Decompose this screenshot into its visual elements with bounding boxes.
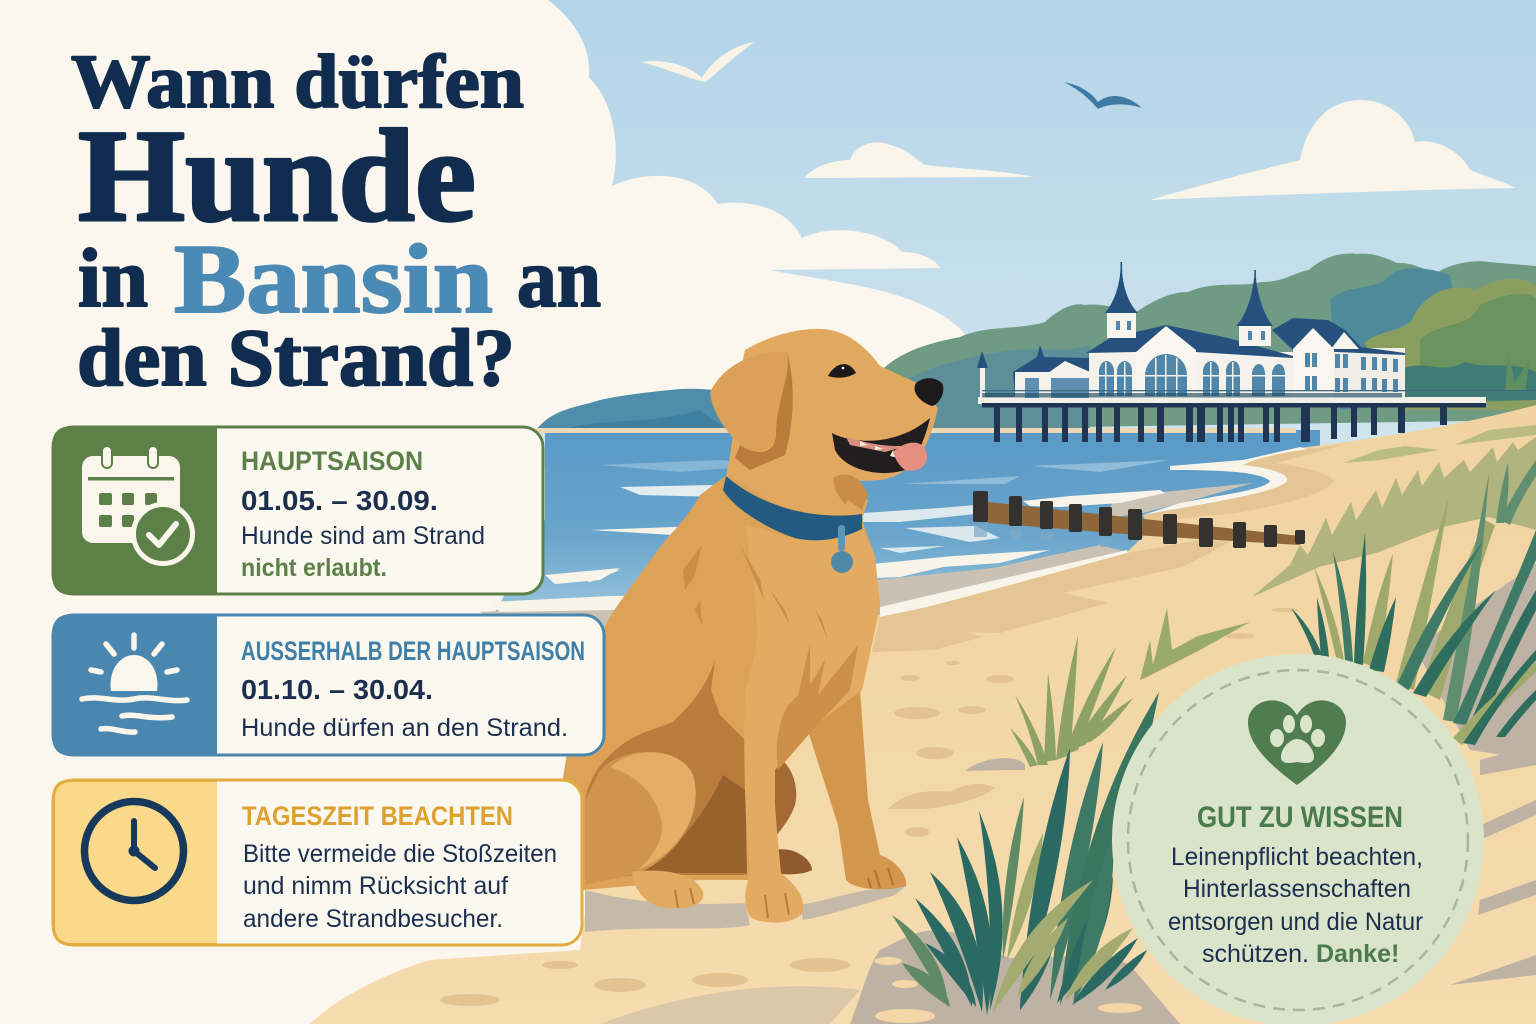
nose — [915, 378, 943, 406]
title: an — [517, 232, 601, 325]
collar — [723, 476, 862, 540]
cream cloud panel — [0, 0, 972, 1024]
circle body text: schützen. Danke! — [1202, 940, 1399, 968]
dog illustration — [562, 329, 943, 923]
hind thigh highlight — [610, 752, 696, 870]
distant clouds — [804, 100, 1515, 200]
card: Tageszeit beachten — [52, 779, 582, 946]
foam at water edge — [880, 550, 1128, 617]
pavilion building — [977, 262, 1405, 398]
tongue — [893, 443, 927, 471]
circle body text — [1168, 843, 1423, 968]
card text: 01.10. – 30.04. — [241, 674, 433, 705]
eye — [828, 364, 856, 378]
beach footprints and shadows — [440, 608, 1299, 1006]
right tower — [1236, 270, 1273, 346]
grass shadows on sand — [600, 563, 1536, 1024]
icon: clock — [84, 802, 184, 900]
mid grass tuft — [1010, 635, 1133, 767]
sky background — [0, 0, 1536, 470]
wet sand left of the dog — [480, 600, 700, 632]
foam band mid — [1023, 490, 1165, 507]
distant headland on the left — [536, 389, 730, 432]
sand spots in shadow — [874, 957, 1142, 1023]
title: den Strand? — [77, 312, 515, 403]
pier pilings — [994, 405, 1447, 442]
circle body text: Leinenpflicht beachten, — [1171, 843, 1423, 871]
tan sand band right — [1143, 445, 1343, 530]
throat shadow — [833, 474, 868, 510]
tan sand band — [872, 540, 1230, 652]
card text: AUSSERHALB DER HAUPTSAISON — [241, 636, 585, 666]
fur marks — [683, 545, 828, 640]
chest — [745, 525, 880, 760]
tall grass right — [1291, 460, 1536, 745]
horizon sand line — [536, 428, 1296, 433]
card text: TAGESZEIT BEACHTEN — [242, 801, 513, 831]
pier — [977, 262, 1536, 442]
circle heading: GUT ZU WISSEN — [1197, 801, 1403, 834]
foam and wet sand along shore — [480, 445, 1343, 652]
title: in — [78, 232, 148, 325]
right wing — [1272, 318, 1405, 398]
small olive tuft — [1140, 608, 1250, 680]
left wing — [1013, 345, 1090, 398]
foam left of the dog — [490, 568, 700, 612]
railing — [982, 390, 1536, 398]
info circle: Gut zu wissen — [1112, 654, 1484, 1024]
wet sand lower — [877, 545, 1127, 607]
card text — [242, 801, 557, 933]
near front leg — [744, 650, 803, 923]
card text: 01.05. – 30.09. — [241, 485, 438, 516]
title: Hunde — [78, 102, 476, 249]
small turret — [977, 351, 988, 398]
deep belly shadow — [637, 775, 747, 873]
main hall — [1086, 325, 1295, 398]
title: Wann dürfen — [71, 40, 524, 124]
card text — [241, 446, 485, 582]
card: Hauptsaison — [52, 426, 543, 595]
card text — [241, 636, 585, 742]
dune grass mass upper right — [1252, 437, 1536, 597]
card text: Hunde dürfen an den Strand. — [241, 714, 568, 742]
small dune grass patch — [1343, 425, 1536, 463]
icon: calendar with check — [82, 446, 192, 564]
foreground grass — [892, 692, 1159, 1015]
foam band lower — [873, 550, 1050, 578]
card text: Hunde sind am Strand — [241, 522, 485, 550]
mouth — [832, 418, 930, 473]
far hind belly — [773, 755, 796, 838]
circle body text: entsorgen und die Natur — [1168, 908, 1423, 936]
shore foam upper — [1143, 447, 1310, 515]
dog ground shadow — [585, 886, 906, 932]
icon: sun over water — [82, 635, 187, 732]
body — [562, 476, 880, 890]
card: Ausserhalb der Hauptsaison — [52, 614, 604, 756]
wet sand upper — [1100, 483, 1253, 519]
icon: heart with paw — [1248, 700, 1346, 785]
sandy beach — [310, 405, 1536, 1024]
bird: white gull — [641, 42, 754, 82]
forested hills behind the pier — [880, 253, 1536, 430]
left tower — [1105, 262, 1138, 338]
far front leg — [808, 690, 906, 889]
dark flank — [585, 660, 747, 880]
collar tag — [831, 525, 853, 573]
bird: blue gull — [1064, 82, 1142, 109]
card text: andere Strandbesucher. — [243, 905, 503, 933]
sea highlights — [560, 460, 1170, 600]
hind thigh — [585, 752, 696, 885]
title: Bansin — [174, 225, 493, 334]
ear — [710, 352, 793, 470]
gums and teeth — [846, 437, 910, 458]
sea — [480, 430, 1320, 640]
near hind paw — [632, 871, 703, 908]
card text: HAUPTSAISON — [241, 446, 423, 476]
far hind foot — [775, 849, 812, 874]
card text: Bitte vermeide die Stoßzeiten — [243, 840, 557, 868]
circle body text: Hinterlassenschaften — [1183, 875, 1411, 903]
head — [726, 329, 938, 532]
card text: nicht erlaubt. — [241, 554, 387, 582]
title — [71, 40, 601, 403]
chest fur shadow — [777, 644, 858, 770]
wooden groyne — [973, 491, 1305, 548]
pier deck — [978, 397, 1486, 408]
card text: und nimm Rücksicht auf — [243, 872, 508, 900]
